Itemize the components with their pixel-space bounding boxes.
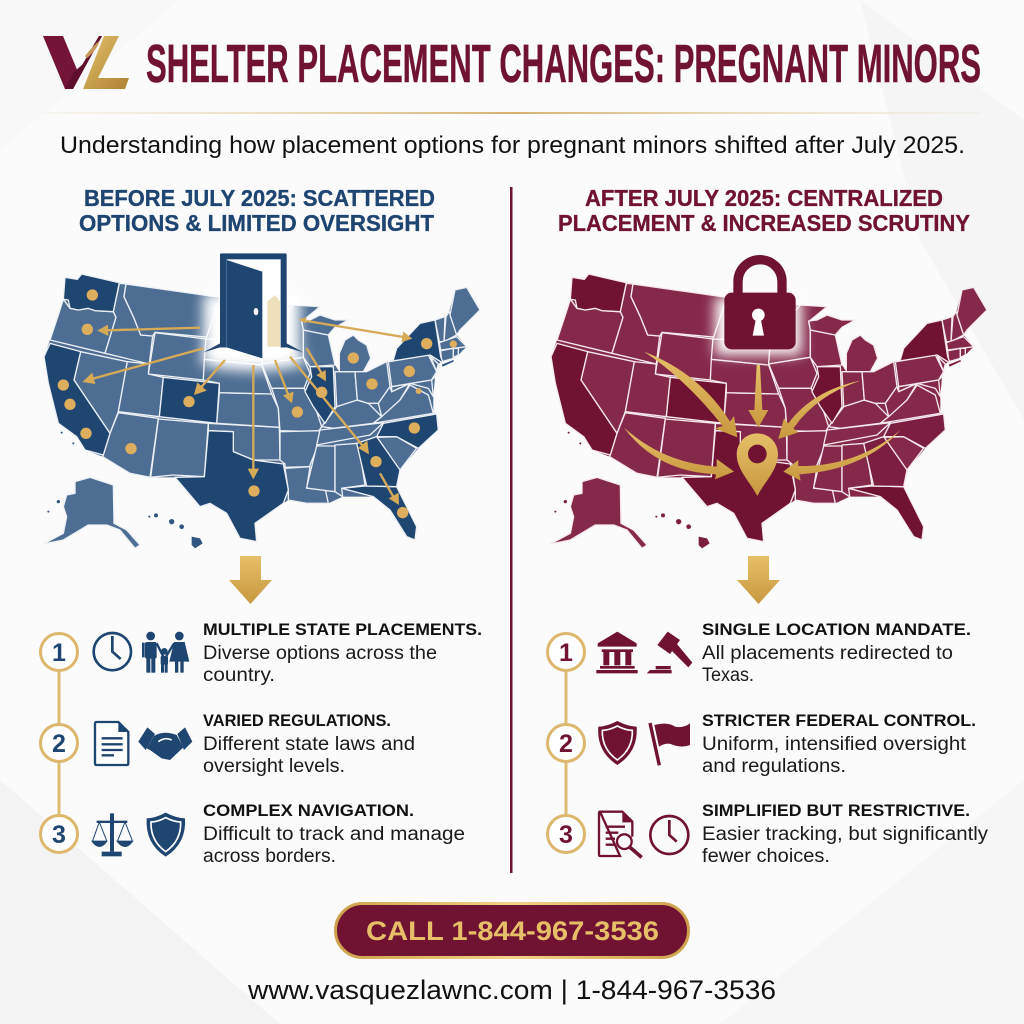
panel: before heading: OPTIONS & LIMITED OVERSIGHT — [79, 210, 434, 236]
text: stricter federal control: Uniform, intensified oversight — [702, 734, 967, 755]
icon: handshake — [138, 727, 192, 760]
panel: before list — [40, 620, 482, 867]
lock, arrows and pin — [624, 260, 901, 496]
text: single location mandate: SINGLE LOCATION MANDATE. — [702, 620, 971, 639]
icon: document — [95, 722, 128, 765]
icon: location pin — [737, 433, 778, 496]
icon: gavel — [647, 632, 692, 673]
text: simplified but restrictive — [702, 801, 989, 867]
footer contact: www.vasquezlawnc.com | 1-844-967-3536 — [247, 975, 776, 1005]
glow behind door — [200, 293, 307, 371]
icon: courthouse — [596, 632, 638, 673]
panel: after map — [550, 260, 987, 548]
header rule — [45, 112, 980, 114]
placement dots — [58, 289, 457, 518]
panel: before heading — [79, 185, 435, 236]
panel: after heading: AFTER JULY 2025: CENTRALIZED — [585, 185, 943, 211]
step connector — [58, 670, 60, 816]
icon: padlock — [724, 260, 796, 349]
text: simplified but restrictive: SIMPLIFIED BUT RESTRICTIVE. — [702, 801, 970, 820]
text: simplified but restrictive: fewer choices. — [702, 846, 830, 867]
text: complex navigation — [203, 801, 465, 867]
arrow: after summary — [737, 556, 780, 604]
text: simplified but restrictive: Easier tracking, but significantly — [702, 824, 989, 845]
icon: family — [142, 632, 189, 673]
panel: before map — [43, 253, 480, 548]
text: complex navigation: COMPLEX NAVIGATION. — [203, 801, 414, 820]
icons — [596, 632, 692, 857]
text: varied regulations: VARIED REGULATIONS. — [203, 711, 391, 730]
glow behind lock — [715, 297, 802, 355]
text: multiple state placements — [203, 620, 482, 686]
center divider — [510, 187, 512, 873]
step numbers — [40, 634, 78, 852]
text: single location mandate — [702, 620, 971, 686]
text: complex navigation: Difficult to track and manage — [203, 824, 465, 845]
map of US states, burgundy — [550, 274, 987, 548]
panel: after heading: PLACEMENT & INCREASED SCRUTINY — [558, 210, 970, 236]
call button: CALL 1-844-967-3536 — [366, 916, 659, 946]
step numbers: 2 — [559, 730, 573, 758]
icon: flag — [648, 723, 690, 766]
step numbers: 1 — [52, 639, 66, 667]
text: single location mandate: Texas. — [702, 665, 754, 686]
panel: after heading — [558, 185, 970, 236]
icons — [91, 632, 192, 857]
icon: open door — [203, 253, 303, 358]
step numbers: 3 — [559, 821, 573, 849]
map of US states, navy — [43, 274, 480, 548]
icon: clock — [94, 633, 131, 670]
text: multiple state placements: MULTIPLE STATE PLACEMENTS. — [203, 620, 482, 639]
panel: before heading: BEFORE JULY 2025: SCATTERED — [84, 185, 435, 211]
call button — [336, 904, 688, 958]
icon: scales of justice — [91, 813, 134, 856]
icon: document with magnifier — [599, 812, 642, 857]
subtitle: Understanding how placement options for pregnant minors shifted after July 2025. — [60, 132, 965, 159]
panel: after list — [548, 620, 989, 867]
arrows converging on Texas — [624, 352, 901, 481]
text: stricter federal control: STRICTER FEDERAL CONTROL. — [702, 711, 976, 730]
arrows to states — [82, 317, 412, 505]
step numbers — [548, 634, 584, 852]
text: multiple state placements: Diverse options across the — [203, 643, 437, 664]
text: complex navigation: across borders. — [203, 846, 336, 867]
text: varied regulations: oversight levels. — [203, 756, 345, 777]
text: varied regulations — [203, 711, 415, 777]
step numbers: 3 — [52, 821, 66, 849]
icon: shield — [598, 721, 637, 765]
icon: shield — [147, 813, 185, 857]
text: stricter federal control: and regulations. — [702, 756, 846, 777]
step connector — [564, 670, 568, 816]
icon: clock — [650, 816, 688, 854]
text: multiple state placements: country. — [203, 665, 275, 686]
text: single location mandate: All placements redirected to — [702, 643, 953, 664]
step numbers: 2 — [52, 730, 66, 758]
step numbers: 1 — [559, 639, 573, 667]
arrow: before summary — [229, 556, 272, 604]
text: varied regulations: Different state laws and — [203, 734, 415, 755]
text: stricter federal control — [702, 711, 976, 777]
logo: VL monogram — [43, 36, 129, 89]
